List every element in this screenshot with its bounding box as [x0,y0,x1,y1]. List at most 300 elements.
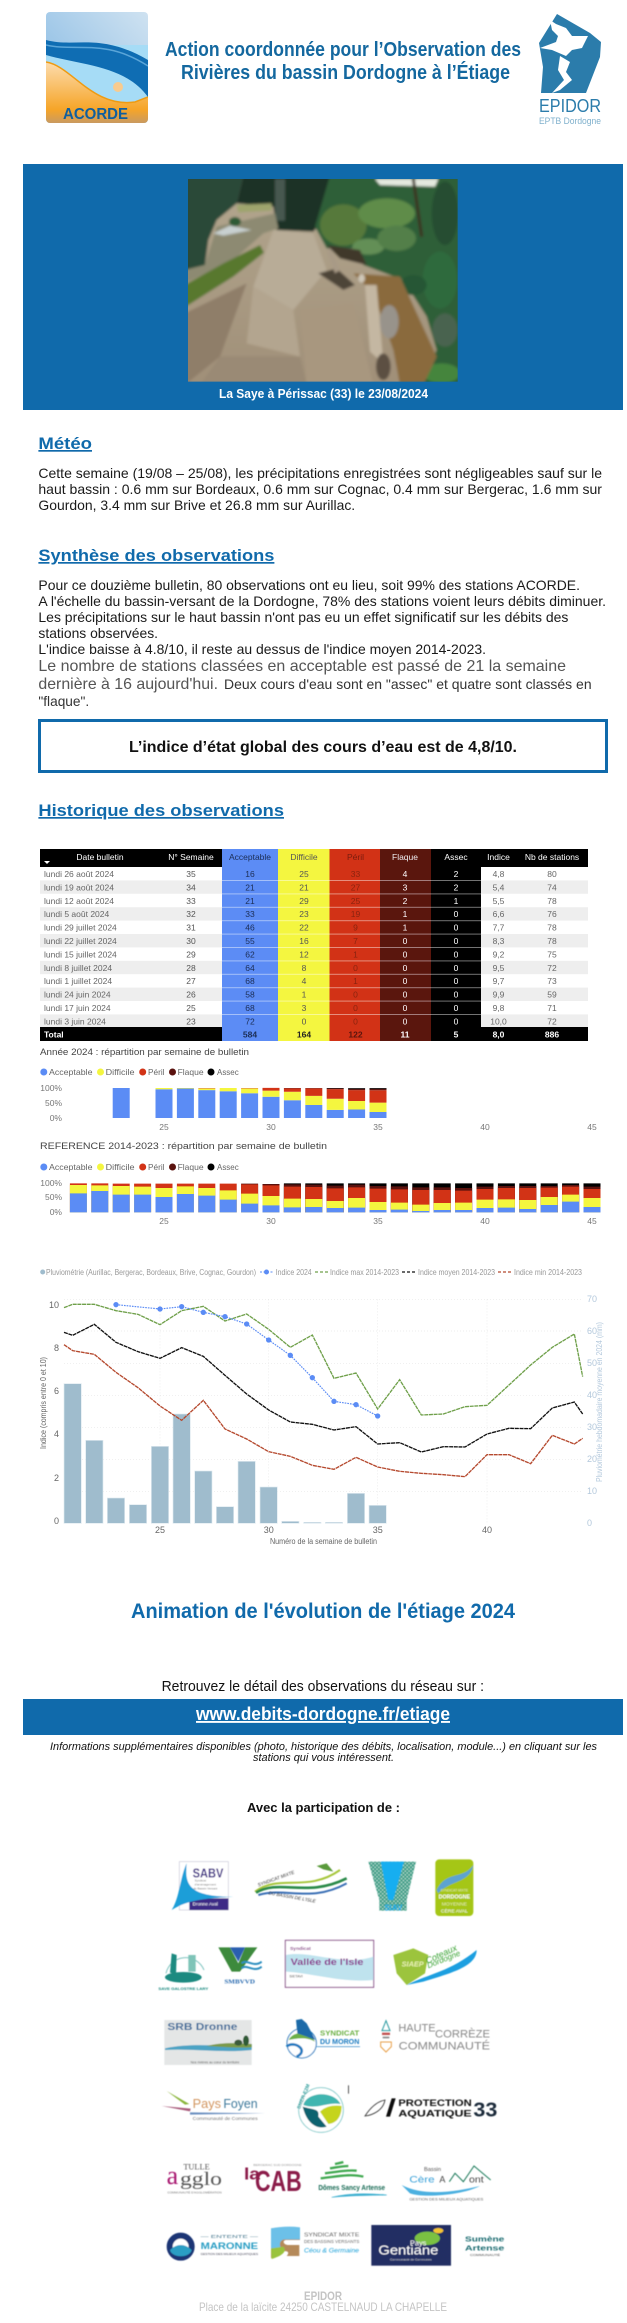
table: historique des bulletins: 0 [353,1016,358,1026]
table: historique des bulletins: Difficile [290,852,318,862]
stacked bars référence [70,1183,600,1212]
heading: animation: Animation de l'évolution de l'étiage 2024 [131,1600,515,1623]
table: historique des bulletins: 0 [454,963,459,973]
heading: participation: Avec la participation de : [247,1800,400,1815]
logo: Haute Corrèze: HAUTE [398,2023,436,2035]
logo: Dordogne moyenne: DORDOGNE [439,1895,470,1901]
axis labels: pluviométrie: 40 [587,1390,597,1400]
table: historique des bulletins: 29 [186,949,196,959]
banner: lien [23,1699,623,1735]
logo: SIAV: SIAV [384,1904,403,1913]
text block: synthèse: dernière à 16 aujourd'hui. [38,676,218,693]
table: historique des bulletins: 1 [403,909,408,919]
table: historique des bulletins: 886 [545,1030,559,1040]
heading: synthèse: Synthèse des observations [38,546,274,565]
table: historique des bulletins: lundi 3 juin 2024 [44,1016,106,1026]
logo: ACORDE: ACORDE [63,106,128,123]
legend: états référence: Difficile [106,1162,135,1172]
table: historique des bulletins: 33 [186,896,196,906]
axis labels: pluviométrie: 70 [587,1294,597,1304]
table: historique des bulletins: 34 [186,882,196,892]
table: historique des bulletins: 0 [454,990,459,1000]
chart: indice et pluviométrie [39,1268,604,1546]
axis labels 2024: 40 [480,1122,490,1132]
axis labels: indice: 30 [264,1525,274,1535]
logo: coteaux de Dordogne: SIAEP [402,1960,424,1969]
table: historique des bulletins: 72 [547,963,557,973]
axis labels: pluviométrie: 60 [587,1326,597,1336]
logo: Dordogne moyenne [435,1859,473,1916]
table: historique des bulletins: 21 [299,882,309,892]
axis labels référence: 30 [266,1216,276,1226]
table: historique des bulletins: 72 [245,1016,255,1026]
legend: indice et pluviométrie: Indice min 2014-2023 [514,1268,582,1277]
table: historique des bulletins: Indice [487,852,510,862]
logo: vallée de l'Isle [285,1940,374,1987]
table: historique des bulletins: 27 [351,882,360,892]
table: historique des bulletins: 25 [299,869,309,879]
footer: Place de la laïcite 24250 CASTELNAUD LA CHAPELLE [199,2300,447,2314]
logo: SMBVVD: SMBVVD [224,1979,256,1985]
footer [199,2289,447,2314]
logo: Entente Maronne: — ENTENTE — [201,2234,258,2240]
text block: synthèse: stations observées. [38,625,158,641]
axis labels 2024 [40,1083,597,1132]
table: historique des bulletins: 0 [454,1016,459,1026]
table: historique des bulletins: 35 [186,869,196,879]
logos: rows 1-3 [158,1859,490,2065]
text block: synthèse [38,577,606,709]
legend: états référence: Acceptable [49,1162,93,1172]
legend: états référence [40,1162,239,1172]
axis labels: indice: 4 [54,1429,59,1439]
table: historique des bulletins: 64 [245,963,255,973]
axis labels: pluviométrie: 0 [587,1518,592,1528]
table: historique des bulletins: 25 [351,896,360,906]
logo: Dômes Sancy Artense [318,2162,387,2197]
logo: SMBVVD [218,1947,262,1985]
axis labels: indice: 2 [54,1473,59,1483]
axis labels: pluviométrie: 50 [587,1358,597,1368]
table: historique des bulletins: 58 [245,990,255,1000]
axis labels référence: 35 [373,1216,383,1226]
text: informations [50,1741,597,1764]
legend: états référence: Assec [217,1162,239,1172]
line: indice moyen [64,1324,583,1452]
axis labels: indice: 25 [155,1525,165,1535]
logo: Save Galostre Lary [158,1953,209,1991]
table: historique des bulletins: 0 [454,1003,459,1013]
logo: SRB Dronne: SRB Dronne [167,2022,238,2033]
chart: répartition 2024 [40,1047,597,1132]
logo: SABV: d'aménagement [195,1882,216,1886]
text block: synthèse: A l'échelle du bassin-versant de la Dordogne, 78% des stations voient leurs débits diminuer. [38,593,606,609]
logo: SIAV [368,1862,416,1913]
chart: référence 2014-2023 [40,1141,600,1226]
table: historique des bulletins: 16 [299,936,309,946]
logo: syndicat mixte Isle [255,1863,347,1904]
table: historique des bulletins: 78 [547,923,557,933]
heading: historique: Historique des observations [38,801,284,820]
table: historique des bulletins: 4,8 [493,869,505,879]
table: historique des bulletins: 32 [186,909,196,919]
table: historique des bulletins: 78 [547,896,557,906]
legend: indice et pluviométrie [40,1268,582,1277]
table: historique des bulletins: lundi 5 août 2024 [44,909,109,919]
table: historique des bulletins: 23 [186,1016,196,1026]
text block: synthèse: "flaque". [38,693,89,709]
logo: Entente Maronne: MARONNE [201,2241,258,2251]
callout: indice global: L’indice d’état global des cours d’eau est de 4,8/10. [129,739,517,756]
legend: états référence: Flaque [178,1162,204,1172]
table: historique des bulletins: Acceptable [229,852,271,862]
axis labels 2024: 30 [266,1122,276,1132]
logo: Gentiane: Gentiane [378,2242,438,2257]
table: historique des bulletins: 2 [454,882,459,892]
table: historique des bulletins: 80 [547,869,557,879]
table: historique des bulletins: Assec [444,852,468,862]
bars: pluviométrie [64,1384,386,1523]
logo: la CAB: la [244,2164,261,2183]
table: historique des bulletins: 584 [243,1030,257,1040]
photo caption: La Saye à Périssac (33) le 23/08/2024 [219,386,429,401]
table: historique des bulletins: 8,3 [493,936,505,946]
table: historique des bulletins: 75 [547,949,557,959]
table: historique des bulletins: 5,4 [493,882,505,892]
table: historique des bulletins: N° Semaine [168,852,214,862]
table: historique des bulletins: 0 [353,990,358,1000]
table: historique des bulletins: 164 [297,1030,311,1040]
text block: synthèse: Les précipitations sur le haut bassin n'ont pas eu un effet significatif sur les débits des [38,609,568,625]
logo: SABV: du Bassin Versant [193,1886,218,1890]
table: historique des bulletins: 59 [547,990,557,1000]
table: historique des bulletins: 0 [454,976,459,986]
table: historique des bulletins: 10,0 [490,1016,507,1026]
table: historique des bulletins: 4 [302,976,307,986]
table: historique des bulletins: 21 [245,896,255,906]
logo: SABV: Dronne Aval [193,1902,218,1907]
logo: Dordogne moyenne: MOYENNE [442,1901,468,1907]
table: historique des bulletins: 74 [547,882,557,892]
logo: Entente Maronne: GESTION DES MILIEUX AQUATIQUES [201,2252,258,2256]
table: historique des bulletins: 0 [403,1003,408,1013]
logo: Pays Foyen: Pays [193,2096,221,2111]
table: historique des bulletins: lundi 12 août 2024 [44,896,114,906]
logo: Tulle agglo [167,2161,222,2195]
table: historique des bulletins: 4 [403,869,408,879]
panel: photo band [23,164,623,410]
table: historique des bulletins: 9,7 [493,976,505,986]
table: historique des bulletins: 8,0 [493,1030,505,1040]
table: historique des bulletins: 27 [186,976,196,986]
table: historique des bulletins: 30 [186,936,196,946]
table: historique des bulletins: 9,5 [493,963,505,973]
logo: EPIDOR: EPTB Dordogne [539,116,601,127]
axis labels référence: 0% [50,1207,62,1217]
logo: Pays Foyen [162,2091,265,2121]
table: historique des bulletins: 22 [299,923,309,933]
table: historique des bulletins: lundi 8 juillet 2024 [44,963,112,973]
legend: états 2024: Difficile [106,1067,135,1077]
logo: Gentiane [371,2225,451,2266]
logo: Pays Foyen: Foyen [223,2096,258,2111]
table: historique des bulletins: 62 [245,949,255,959]
photo: La Saye à Périssac [185,176,461,385]
text: informations: stations qui vous intéressent. [253,1752,394,1764]
text block: synthèse: Pour ce douzième bulletin, 80 observations ont eu lieu, soit 99% des stations ACORDE. [38,577,580,593]
table: historique des bulletins: 0 [403,963,408,973]
logo: la CAB [244,2163,302,2198]
axis labels référence: 25 [159,1216,169,1226]
table: historique des bulletins: 122 [348,1030,363,1040]
footer: EPIDOR [304,2289,342,2303]
table: historique des bulletins: 6,6 [493,909,505,919]
logo: la CAB: CAB [255,2166,302,2198]
logo: Cère Amont [402,2166,491,2202]
logo: Cère Amont: ont [469,2175,484,2185]
axis labels 2024: 50% [45,1098,62,1108]
table: historique des bulletins: 78 [547,936,557,946]
logo: Sumène Artense [465,2235,504,2257]
logo: syndicat mixte Isle: SYNDICAT MIXTE [257,1869,296,1888]
table: historique des bulletins: lundi 29 juillet 2024 [44,923,117,933]
table: historique des bulletins: 0 [403,990,408,1000]
axis labels 2024: 45 [587,1122,597,1132]
table: historique des bulletins: 0 [353,963,358,973]
legend: états 2024 [40,1067,239,1077]
logo: Save Galostre Lary: SAVE GALOSTRE LARY [158,1986,209,1991]
axis labels: indice: Numéro de la semaine de bulletin [270,1537,377,1546]
logo: Gentiane: Pays [410,2239,427,2248]
axis labels référence: 40 [480,1216,490,1226]
table: historique des bulletins: Total [44,1030,64,1040]
axis labels référence: 45 [587,1216,597,1226]
chart title: année 2024: Année 2024 : répartition par semaine de bulletin [40,1047,249,1057]
text block: météo: haut bassin : 0.6 mm sur Bordeaux, 0.6 mm sur Cognac, 0.4 mm sur Bergerac, 1.6 mm sur [38,481,602,497]
logo: Dordogne moyenne: SYNDICAT MIXTE [441,1889,469,1893]
logo: Tulle agglo: gglo [180,2169,222,2190]
logo: SMER-E2M [296,2083,349,2132]
table: historique des bulletins: 76 [547,909,557,919]
logo: ACORDE [46,12,148,123]
line: indice max [64,1304,583,1415]
logo: Dômes Sancy Artense: Dômes Sancy Artense [318,2185,385,2192]
logo: Cère Amont: Bassin [424,2167,441,2173]
axis labels: indice: 6 [54,1386,59,1396]
table: historique des bulletins: Flaque [392,852,418,862]
axis labels: indice: 10 [49,1300,59,1310]
text: informations: Informations supplémentaires disponibles (photo, historique des débits, localisation, module...) en cliquant sur les [50,1741,597,1753]
callout: indice global [40,720,606,772]
table: historique des bulletins: 19 [351,909,360,919]
axis labels: pluviométrie: 20 [587,1454,597,1464]
table: historique des bulletins: 0 [454,936,459,946]
logo: protection aquatique 33: AQUATIQUE [398,2109,472,2119]
logo: protection aquatique 33: 33 [473,2099,497,2122]
logo: Céou et Germaine: DES BASSINS VERSANTS [304,2239,359,2244]
logo: EPIDOR: EPIDOR [539,96,601,116]
logo: syndicat mixte Isle: DU BASSIN DE L'ISLE [268,1890,317,1904]
logo: Tulle agglo: a [167,2161,179,2190]
table: historique des bulletins: 7,7 [493,923,505,933]
table: historique des bulletins: 0 [403,1016,408,1026]
logo: SABV: SABV [193,1867,224,1881]
axis labels: pluviométrie: 30 [587,1422,597,1432]
table: historique des bulletins: Nb de stations [525,852,579,862]
table: historique des bulletins: 3 [403,882,408,892]
logo: Haute Corrèze: COMMUNAUTÉ [399,2039,490,2052]
text block: météo: Cette semaine (19/08 – 25/08), les précipitations enregistrées sont négligeables sauf sur le [38,465,602,481]
table: historique des bulletins: 73 [547,976,557,986]
legend: indice et pluviométrie: Indice 2024 [276,1268,312,1277]
table: historique des bulletins: 1 [353,949,358,959]
table: historique des bulletins: 0 [454,909,459,919]
legend: états 2024: Péril [148,1067,165,1077]
axis labels: indice: Indice (compris entre 0 et 10) [39,1357,48,1449]
table: historique des bulletins: Péril [347,852,364,862]
table: historique des bulletins: 2 [454,869,459,879]
logos: rows 4-6 [162,2083,504,2266]
table: historique des bulletins: 55 [245,936,255,946]
line: indice 2024 [113,1302,380,1419]
table: historique des bulletins: 9,8 [493,1003,505,1013]
table: historique des bulletins: 0 [403,976,408,986]
table: historique des bulletins: 9,9 [493,990,505,1000]
table: historique des bulletins: 1 [302,990,307,1000]
logo: coteaux de Dordogne: Dordogne [426,1948,462,1970]
table: historique des bulletins: 1 [353,976,358,986]
logo: Sumène Artense: Artense [465,2244,504,2253]
logo: Dordogne moyenne: CÈRE AVAL [441,1908,468,1915]
logo: syndicat du Moron: DU MORON [320,2039,359,2046]
logo: protection aquatique 33: PROTECTION [398,2098,472,2108]
axis labels: indice: 40 [482,1525,492,1535]
axis labels: pluviométrie: Pluviométrie hebdomadaire moyenne en 2024 (mm) [595,1322,604,1482]
logo: Cère Amont: Cère [409,2175,435,2185]
table: historique des bulletins: 16 [245,869,255,879]
table: historique des bulletins: lundi 26 août 2024 [44,869,114,879]
table: historique des bulletins: 33 [245,909,255,919]
table: historique des bulletins: 68 [245,1003,255,1013]
table: historique des bulletins: 28 [186,963,196,973]
table: historique des bulletins: 29 [299,896,309,906]
table: historique des bulletins: lundi 24 juin 2024 [44,990,111,1000]
axis labels: pluviométrie [587,1294,604,1528]
heading: Météo: Météo [38,434,92,453]
table: historique des bulletins: 0 [403,936,408,946]
table: historique des bulletins: 33 [351,869,360,879]
logo: Tulle agglo: COMMUNAUTÉ D'AGGLOMÉRATION [167,2190,222,2195]
logo: Céou et Germaine [271,2227,360,2259]
text block: météo [38,465,602,513]
legend: états 2024: Acceptable [49,1067,93,1077]
logo: SABV [172,1862,233,1910]
logo: Haute Corrèze: CORRÈZE [435,2027,490,2040]
table: historique des bulletins: 46 [245,923,255,933]
table: historique des bulletins: 31 [186,923,196,933]
text block: synthèse: Deux cours d'eau sont en "assec" et quatre sont classés en [224,676,592,692]
axis labels: indice: 8 [54,1343,59,1353]
table: historique des bulletins: 0 [353,1003,358,1013]
table: historique des bulletins: lundi 17 juin 2024 [44,1003,111,1013]
table: historique des bulletins: 5,5 [493,896,505,906]
legend: indice et pluviométrie: Indice moyen 2014-2023 [418,1268,495,1277]
table: historique des bulletins: 3 [302,1003,307,1013]
table: historique des bulletins: 21 [245,882,255,892]
logo: syndicat du Moron: SYNDICAT [320,2031,360,2038]
logo: coteaux de Dordogne [393,1942,477,1985]
text: retrouvez: Retrouvez le détail des observations du réseau sur : [162,1678,484,1695]
table: historique des bulletins: lundi 19 août 2024 [44,882,114,892]
logo: Haute Corrèze [381,2021,490,2052]
banner: lien: www.debits-dordogne.fr/etiage [195,1703,450,1724]
title: Action coordonnée pour l’Observation des [165,39,521,61]
legend: indice et pluviométrie: Pluviométrie (Aurillac, Bergerac, Bordeaux, Brive, Cognac, Gourdon) [46,1268,256,1277]
table: historique des bulletins: lundi 15 juillet 2024 [44,949,117,959]
table: historique des bulletins: 1 [454,896,459,906]
axis labels 2024: 0% [50,1113,62,1123]
axis labels: indice [39,1300,492,1546]
table: historique des bulletins: 72 [547,1016,557,1026]
logo: vallée de l'Isle: Syndicat [290,1946,311,1952]
table: historique des bulletins: 0 [302,1016,307,1026]
axis labels 2024: 35 [373,1122,383,1132]
table: historique des bulletins: 23 [299,909,309,919]
table: historique des bulletins: lundi 1 juillet 2024 [44,976,112,986]
table: historique des bulletins: 0 [454,949,459,959]
axis labels: indice: 0 [54,1516,59,1526]
logo: Cère Amont: GESTION DES MILIEUX AQUATIQUES [409,2198,484,2202]
axis labels référence [40,1178,597,1226]
table: historique des bulletins: 68 [245,976,255,986]
table: historique des bulletins: 11 [400,1030,410,1040]
table: historique des bulletins: 26 [186,990,196,1000]
logo: Pays Foyen: Communauté de Communes [193,2116,258,2121]
logo: Tulle agglo: TULLE [183,2162,210,2171]
logo: syndicat du Moron [287,2019,360,2058]
axis labels référence: 50% [45,1192,62,1202]
logo: Céou et Germaine: Céou & Germaine [304,2248,359,2255]
axis labels 2024: 25 [159,1122,169,1132]
logo: Cère Amont: A [439,2175,445,2185]
table: historique des bulletins: 1 [403,923,408,933]
logo: vallée de l'Isle: Vallée de l'Isle [291,1957,363,1967]
text block: synthèse: Le nombre de stations classées en acceptable est passé de 21 la semaine [38,658,566,675]
logo: Entente Maronne [170,2234,258,2258]
table: historique des bulletins: 8 [302,963,307,973]
logo: Céou et Germaine: SYNDICAT MIXTE [304,2233,360,2239]
logo: Gentiane: Communauté de Communes [390,2258,432,2262]
line: indice min [64,1345,583,1477]
table: historique des bulletins: 9,2 [493,949,505,959]
logo: SRB Dronne: Nos rivières au cœur du territoire [191,2060,239,2064]
axis labels: pluviométrie: 10 [587,1486,597,1496]
table: historique des bulletins: 25 [186,1003,196,1013]
axis labels référence: 100% [40,1178,62,1188]
legend: indice et pluviométrie: Indice max 2014-2023 [330,1268,399,1277]
logo: coteaux de Dordogne: Coteaux [424,1942,459,1966]
chart title: référence: REFERENCE 2014-2023 : répartition par semaine de bulletin [40,1141,327,1151]
table: historique des bulletins: Date bulletin [76,852,124,862]
table: historique des bulletins: 7 [353,936,358,946]
axis labels: indice: 35 [373,1525,383,1535]
axis labels 2024: 100% [40,1083,62,1093]
logo: Sumène Artense: COMMUNAUTÉ [470,2252,500,2257]
logo: SRB Dronne [164,2020,252,2065]
table: historique des bulletins [40,849,588,1041]
title: Rivières du bassin Dordogne à l’Étiage [181,61,510,84]
table: historique des bulletins: 0 [403,949,408,959]
